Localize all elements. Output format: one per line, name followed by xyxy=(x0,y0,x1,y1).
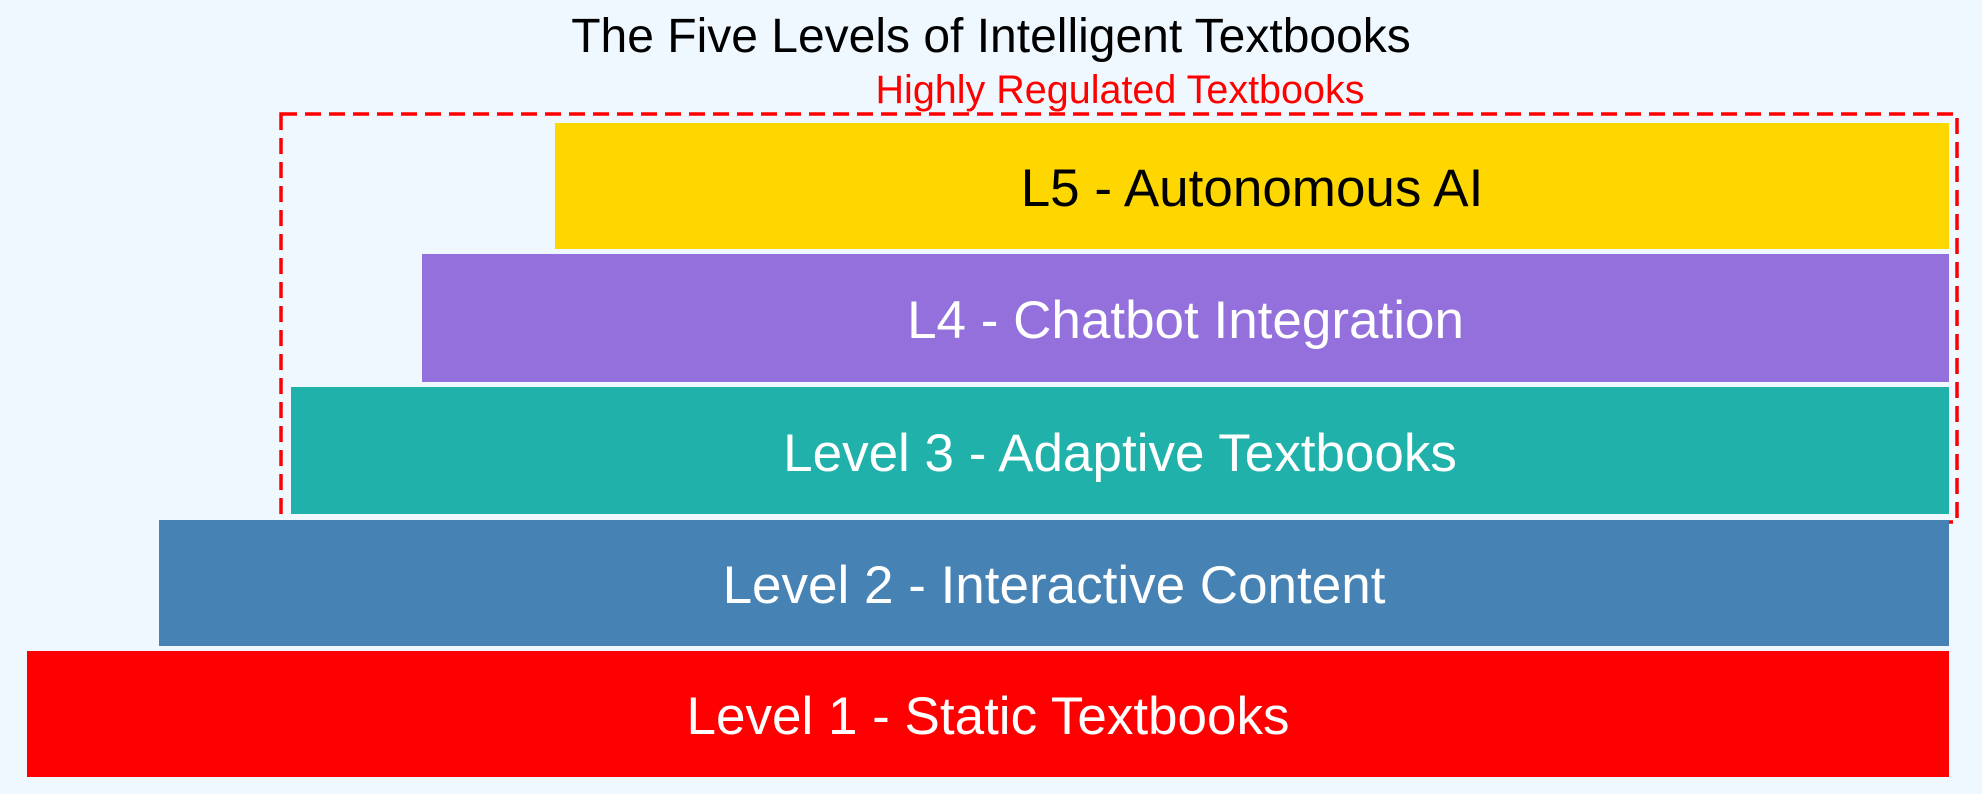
label: highly regulated: Highly Regulated Textbooks xyxy=(876,68,1364,112)
bar: level 2: Level 2 - Interactive Content xyxy=(723,556,1385,615)
bar: level 3 xyxy=(291,387,1949,514)
bar: level 4 xyxy=(422,254,1949,382)
bar: level 1: Level 1 - Static Textbooks xyxy=(687,687,1289,746)
bar: level 3: Level 3 - Adaptive Textbooks xyxy=(783,424,1457,482)
bar: level 1 xyxy=(27,651,1949,777)
dashed region: highly regulated xyxy=(279,112,1959,524)
title: The Five Levels of Intelligent Textbooks xyxy=(571,10,1411,63)
bar: level 5 xyxy=(555,123,1949,249)
bar: level 5: L5 - Autonomous AI xyxy=(1021,159,1483,218)
bar: level 2 xyxy=(159,520,1949,646)
bar: level 4: L4 - Chatbot Integration xyxy=(907,291,1464,350)
